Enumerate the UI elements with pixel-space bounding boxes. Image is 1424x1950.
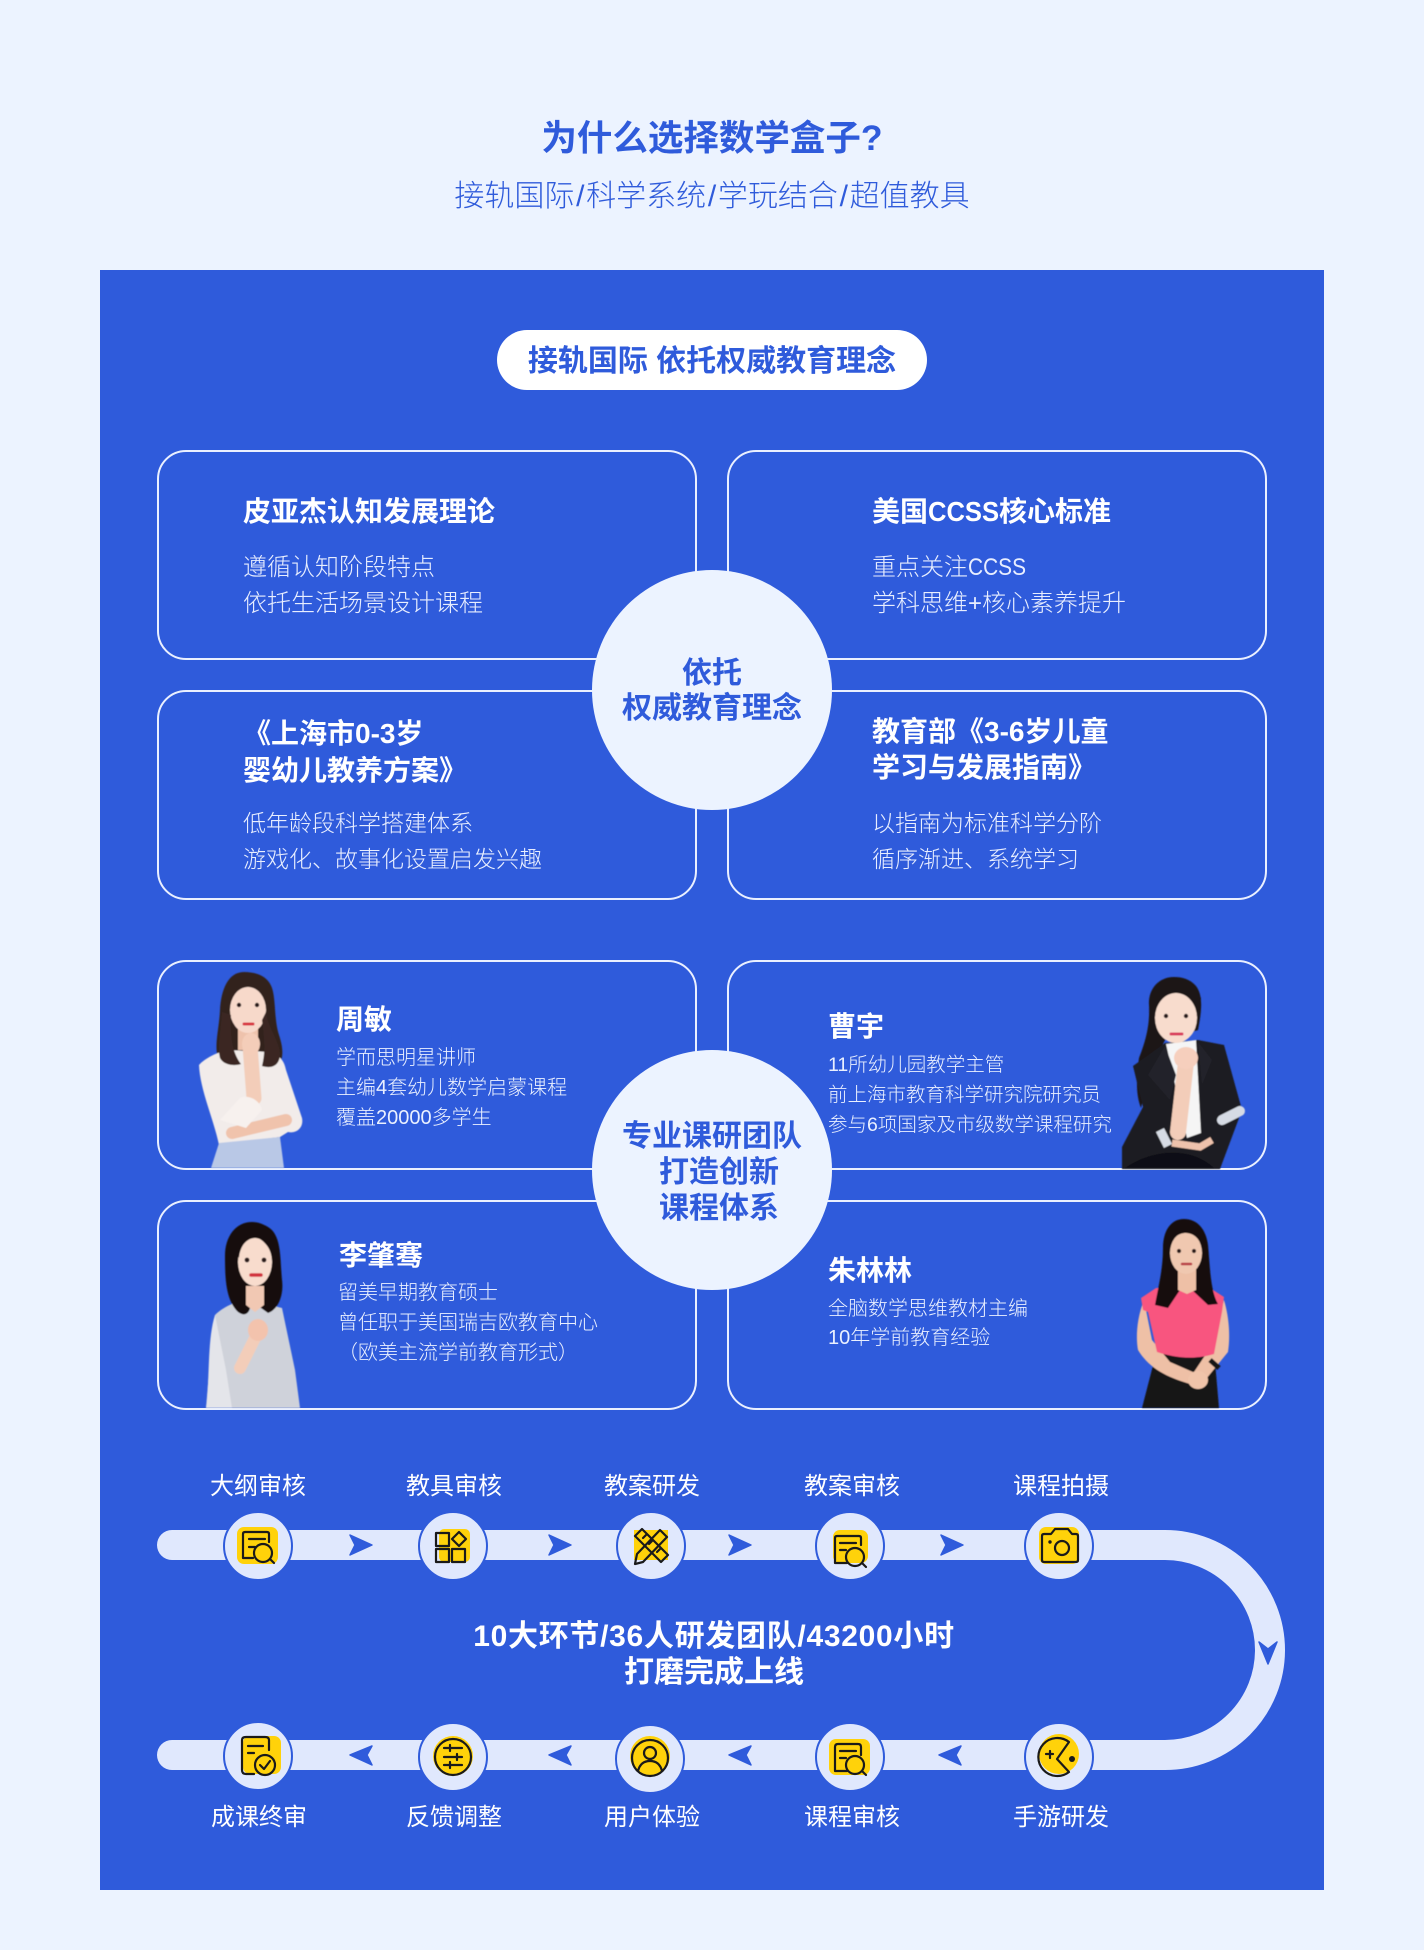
icon: document search [237,1527,278,1564]
card: teacher Li Zhaoqian: 李肇骞 [339,1239,423,1271]
card: Piaget theory: 依托生活场景设计课程 [243,590,483,617]
icon: document search [829,1739,870,1775]
card: teacher Zhu Linlin: 全脑数学思维教材主编 [828,1297,1028,1320]
card: teacher Zhu Linlin: 10年学前教育经验 [828,1326,990,1349]
icon: ruler and pencil [634,1529,668,1564]
step: feedback adjustment [406,1723,502,1831]
step: user experience: 用户体验 [604,1804,700,1831]
step: lesson development: 教案研发 [604,1473,700,1500]
photo: Cao Yu [1122,977,1242,1169]
step: toy review [406,1473,502,1580]
card: Ministry guide [728,691,1266,899]
icon: game pacman [1038,1734,1079,1776]
card: teacher Cao Yu [728,961,1266,1169]
card: teacher Zhou Min: 周敏 [336,1004,392,1035]
card: Shanghai plan: 婴幼儿教养方案》 [243,755,467,786]
step: game development [1013,1723,1109,1831]
card: CCSS standard: 重点关注CCSS [872,554,1026,581]
card: CCSS standard [728,451,1266,659]
card: Piaget theory: 皮亚杰认知发展理论 [243,496,495,527]
card: teacher Zhou Min: 学而思明星讲师 [336,1046,476,1069]
center circle: team: 打造创新 [659,1156,779,1189]
step: toy review: 教具审核 [406,1473,502,1500]
process track [172,1545,1270,1755]
photo: Li Zhaoqian [206,1222,300,1408]
card: Piaget theory [158,451,696,659]
icon: user avatar [630,1736,670,1776]
step: outline review [210,1473,306,1580]
subtitle: 接轨国际/科学系统/学玩结合/超值教具 [454,180,970,213]
photo: Zhu Linlin [1137,1219,1229,1408]
card: teacher Zhou Min: 覆盖20000多学生 [336,1106,492,1129]
card: Ministry guide: 教育部《3-6岁儿童 [872,716,1108,747]
step: user experience [604,1725,700,1831]
icon: document check [242,1736,281,1775]
step: filming [1013,1473,1109,1580]
icon: document search [833,1530,868,1567]
card: Shanghai plan [158,691,696,899]
title: 为什么选择数学盒子? [541,118,883,158]
center statement: 10大环节/36人研发团队/43200小时 [473,1620,955,1653]
card: Shanghai plan: 《上海市0-3岁 [243,718,423,749]
step: lesson development [604,1473,700,1580]
arrows along track [350,1535,1277,1765]
icon: camera [1039,1527,1079,1564]
step: filming: 课程拍摄 [1013,1473,1109,1500]
card: Shanghai plan: 游戏化、故事化设置启发兴趣 [243,846,542,872]
step: course review [804,1723,900,1831]
icon: sliders [433,1736,473,1776]
step: course review: 课程审核 [804,1804,900,1831]
center circle: team [592,1050,832,1290]
photo: Zhou Min [199,972,302,1168]
card: Shanghai plan: 低年龄段科学搭建体系 [243,810,473,836]
card: teacher Cao Yu: 参与6项国家及市级数学课程研究 [828,1114,1112,1136]
card: teacher Li Zhaoqian: （欧美主流学前教育形式） [338,1341,578,1364]
center statement: 打磨完成上线 [624,1656,804,1689]
card: teacher Cao Yu: 11所幼儿园教学主管 [828,1054,1004,1076]
pill heading [497,330,927,390]
center circle: team: 课程体系 [659,1192,779,1225]
step: game development: 手游研发 [1013,1804,1109,1831]
card: Ministry guide: 循序渐进、系统学习 [872,846,1079,872]
step: lesson review: 教案审核 [804,1473,900,1500]
card: CCSS standard: 学科思维+核心素养提升 [872,590,1126,617]
card: teacher Zhou Min: 主编4套幼儿数学启蒙课程 [336,1076,567,1099]
card: Ministry guide: 学习与发展指南》 [872,752,1096,783]
center circle: philosophy: 权威教育理念 [622,691,802,725]
step: outline review: 大纲审核 [210,1473,306,1500]
icon: grid blocks [436,1529,470,1562]
card: teacher Cao Yu: 曹宇 [828,1011,884,1042]
card: teacher Zhu Linlin: 朱林林 [828,1255,912,1286]
step: lesson review [804,1473,900,1580]
step: final review: 成课终审 [211,1804,307,1831]
center statement [473,1620,955,1689]
card: teacher Li Zhaoqian: 留美早期教育硕士 [338,1281,498,1304]
card: teacher Zhou Min [158,961,696,1169]
center circle: philosophy [592,570,832,810]
card: teacher Li Zhaoqian [158,1201,696,1409]
card: teacher Cao Yu: 前上海市教育科学研究院研究员 [828,1084,1101,1106]
card: Piaget theory: 遵循认知阶段特点 [243,554,435,581]
step: final review [211,1722,307,1831]
step: feedback adjustment: 反馈调整 [406,1804,502,1831]
center circle: philosophy: 依托 [682,657,742,690]
center circle: team: 专业课研团队 [622,1120,802,1153]
pill heading: 接轨国际 依托权威教育理念 [528,344,896,378]
panel: main blue background [100,270,1324,1890]
card: teacher Zhu Linlin [728,1201,1266,1409]
card: Ministry guide: 以指南为标准科学分阶 [872,810,1102,836]
card: teacher Li Zhaoqian: 曾任职于美国瑞吉欧教育中心 [338,1311,598,1334]
card: CCSS standard: 美国CCSS核心标准 [872,496,1111,527]
